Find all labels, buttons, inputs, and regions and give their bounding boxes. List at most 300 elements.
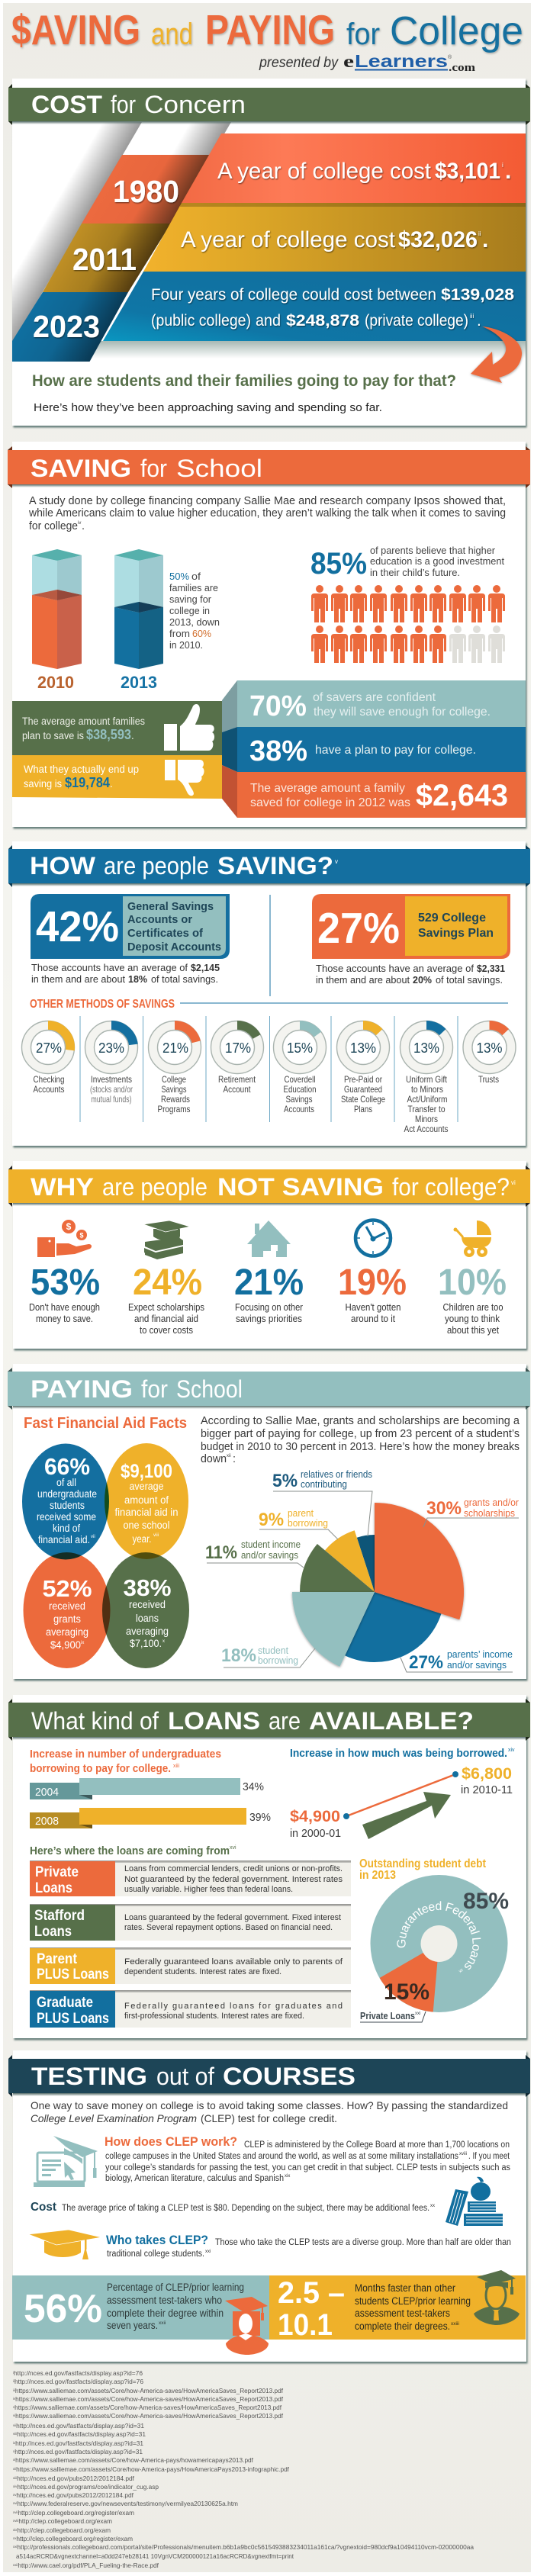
stat: 24 percent [128, 1262, 204, 1336]
how does CLEP work [105, 2134, 510, 2183]
donut: checking accounts 27 percent [21, 1021, 75, 1095]
heading ribbon: why not saving [8, 1166, 530, 1207]
heading ribbon: what kind of loans: AVAILABLE? [309, 1707, 474, 1735]
heading ribbon: how are people saving [8, 845, 530, 887]
donut: retirement account 17 percent: Account [223, 1084, 251, 1095]
fact: 9100 dollars: viii [153, 1533, 159, 1538]
who takes CLEP: Who takes CLEP? [106, 2233, 208, 2247]
heading ribbon: saving for school: for [140, 455, 167, 482]
chart: 2010 bar [32, 549, 82, 692]
fold shading [12, 122, 526, 359]
heading: increase in undergraduates borrowing: xiii [173, 1764, 180, 1769]
band: plan to save: The average amount families [22, 716, 145, 727]
donut: trusts 13 percent: 13% [476, 1040, 502, 1056]
stat: 19 percent: Haven't gotten [345, 1302, 401, 1313]
dividers [79, 1016, 458, 1122]
pie label: 18 percent student borrowing: 18% [221, 1645, 256, 1666]
card: 27 percent 529 plan: in them and are about [316, 974, 410, 986]
heading: fast financial aid facts: Fast Financial Aid Facts [24, 1415, 187, 1432]
intro paragraph [31, 2099, 508, 2124]
year 2023: 2023 [33, 309, 100, 344]
panel: loans [13, 1695, 529, 2041]
heading ribbon: why not saving: NOT SAVING [217, 1173, 384, 1201]
heading: increase in undergraduates borrowing: borrowing to pay for college. [30, 1763, 171, 1775]
1980 cost text: i [502, 162, 503, 169]
donut: college savings rewards 21 percent: Rewards [161, 1094, 190, 1105]
band: 56 percent: 56% [24, 2287, 102, 2331]
fact: 66 percent [37, 1453, 97, 1545]
families saving text: college in [169, 605, 210, 616]
heading ribbon: saving for school: School [176, 455, 262, 482]
band: actually saved: $19,784 [65, 775, 110, 790]
band: months faster: Months faster than other [355, 2282, 455, 2294]
stat: 85 percent of parents: education is a good investment [370, 555, 504, 567]
loan row: private: Private [35, 1864, 79, 1880]
fact: 38 percent [124, 1574, 171, 1649]
icon: thumb up [164, 704, 214, 751]
band: 2023 main [103, 272, 526, 341]
stat: 21 percent: 21% [234, 1262, 304, 1303]
chart: borrowed amount line: $4,900 [290, 1808, 340, 1825]
heading: increase in how much borrowed: Increase in how much was being borrowed. [290, 1748, 507, 1760]
intro paragraph: (CLEP) test for college credit. [201, 2112, 337, 2124]
heading ribbon: why not saving: WHY [31, 1173, 94, 1201]
2023 cost text: Four years of college could cost between [151, 286, 436, 304]
card: 42 percent general savings: Deposit Accounts [127, 941, 221, 954]
stat: 85 percent of parents: of parents believe that higher [370, 545, 496, 556]
band: actually saved: saving is [24, 778, 62, 790]
donut: retirement account 17 percent: 17% [225, 1040, 251, 1056]
stat: 10 percent: Children are too [442, 1302, 503, 1313]
chart: borrowed amount line [290, 1765, 513, 1840]
donut: coverdell 15 percent: Accounts [284, 1104, 314, 1114]
fact: 66 percent: undergraduate [37, 1488, 97, 1500]
footnotes [13, 2369, 474, 2569]
footnotes: x [13, 2449, 15, 2453]
heading ribbon: cost for concern [8, 84, 530, 125]
donut: uniform gift 13 percent: Minors [415, 1114, 438, 1124]
families saving text: of [191, 571, 201, 582]
pie label: 27 percent parents income: parents’ income [447, 1648, 513, 1660]
donut: college savings rewards 21 percent: Savings [162, 1084, 186, 1095]
band: 2011 main [143, 203, 526, 272]
label: private loans: Private Loans [360, 2010, 415, 2021]
band: 38 percent have a plan: 38% [249, 735, 307, 767]
donut: pre-paid 13 percent: Plans [354, 1104, 372, 1114]
donut: trusts 13 percent [463, 1021, 516, 1085]
band: months faster: assessment test-takers [355, 2307, 450, 2319]
paragraph: grants and scholarships: According to Sallie Mae, grants and scholarships are becoming a [201, 1415, 520, 1427]
intro paragraph: . [82, 520, 85, 532]
footnotes: xii [13, 2467, 16, 2471]
fact: 9100 dollars: one school [124, 1520, 169, 1531]
intro paragraph: One way to save money on college is to avoid taking some classes. How? By passing the standardized [31, 2099, 508, 2111]
band: 56 percent: assessment test-takers who [107, 2295, 222, 2306]
footnotes: http://nces.ed.gov/fastfacts/display.asp?id=31 [17, 2430, 146, 2438]
band: average saved [222, 765, 526, 818]
band: months faster: 2.5 – [278, 2276, 345, 2310]
footnotes: v [13, 2405, 15, 2409]
how does CLEP work: CLEP is administered by the College Board at more than 1,700 locations on [244, 2140, 510, 2150]
band: actually saved: What they actually end up [24, 764, 139, 775]
donut: checking accounts 27 percent: 27% [36, 1040, 62, 1056]
cost: xx [430, 2204, 435, 2208]
2023 cost text: iii [470, 313, 474, 320]
1980 cost text: $3,101 [435, 159, 500, 184]
bar: 2004 [30, 1778, 264, 1799]
fact: 66 percent: 66% [44, 1453, 90, 1480]
card: 27 percent 529 plan: Those accounts have an average of [316, 963, 474, 974]
pie label: 11 percent student income: student income [241, 1539, 301, 1550]
loan row: private: Loans from commercial lenders, credit unions or non-profits. [124, 1864, 343, 1873]
fact: 66 percent: of all [56, 1477, 76, 1488]
band: months faster: complete their degrees. [355, 2320, 450, 2332]
icon: hand with coins [37, 1220, 92, 1257]
bar: 2008: 39% [249, 1811, 271, 1824]
footnotes: vi [13, 2414, 15, 2417]
pie label: 30 percent grants [423, 1497, 520, 1527]
pictogram: people [311, 585, 505, 663]
families saving text [169, 571, 220, 651]
band: 2011 left fold [43, 224, 171, 292]
footnotes: http://www.cael.org/pdf/PLA_Fueling-the-Race.pdf [18, 2562, 159, 2569]
donut: college savings rewards 21 percent: College [162, 1074, 186, 1085]
footnotes: http://professionals.collegeboard.com/portal/site/Professionals/menuitem.b6b1a9bc0c5615493883234011a161ca/?vgnextoid=980dcf9a10494110vcm-02000000aa [17, 2543, 474, 2551]
footnotes: viii [13, 2432, 17, 2436]
fact: 9100 dollars [114, 1461, 179, 1545]
footnotes: http://nces.ed.gov/fastfacts/display.asp?id=76 [14, 2378, 143, 2385]
cost [31, 2201, 435, 2214]
pie label: 27 percent parents income: and/or savings [447, 1659, 507, 1671]
families saving text: 2013, down [169, 616, 220, 628]
heading: increase in undergraduates borrowing [30, 1748, 221, 1775]
icon: thumb down [165, 760, 204, 796]
pie label: 27 percent parents income: 27% [409, 1652, 443, 1673]
pie label: 11 percent student income: and/or savings [241, 1549, 298, 1561]
chart: outstanding debt donut: 15% [384, 1979, 429, 2005]
footnotes: http://nces.ed.gov/fastfacts/display.asp?id=31 [16, 2422, 144, 2430]
chart: borrowed amount line: in 2000-01 [290, 1828, 341, 1840]
chart: 2013 bar [114, 549, 163, 692]
footnotes: http://nces.ed.gov/pubs2012/2012184.pdf [17, 2475, 135, 2482]
heading ribbon: testing out of courses: TESTING [31, 2063, 147, 2090]
donut: pre-paid 13 percent: State College [341, 1094, 385, 1105]
footnotes: xv [13, 2493, 17, 2497]
heading ribbon: what kind of loans [8, 1699, 530, 1741]
stat: 19 percent [338, 1262, 407, 1324]
band: 2023 left fold [12, 292, 128, 362]
icon: laptop and graduation cap [34, 2136, 98, 2187]
footnotes: xvi [13, 2501, 17, 2505]
card: 42 percent general savings: 42% [36, 902, 119, 951]
loan row: stafford: Loans guaranteed by the federal government. Fixed interest [124, 1913, 341, 1922]
footnotes: http://nces.ed.gov/pubs2012/2012184.pdf [16, 2491, 134, 2499]
heading ribbon: paying for school: for [141, 1375, 168, 1403]
presented by eLearners logo: .com [449, 62, 476, 74]
families saving text: 60% [192, 628, 211, 639]
fact: 66 percent: financial aid. [38, 1534, 90, 1545]
donut: pre-paid 13 percent: Pre-Paid or [344, 1074, 382, 1085]
donut: pre-paid 13 percent [337, 1021, 389, 1114]
donut: coverdell 15 percent: 15% [287, 1040, 313, 1056]
pie label: 9 percent parent borrowing: borrowing [288, 1517, 328, 1529]
fact: 9100 dollars: $9,100 [121, 1461, 172, 1482]
footnotes: xiii [13, 2476, 17, 2480]
stat: 19 percent: 19% [338, 1262, 407, 1303]
pie label: 27 percent parents income [400, 1648, 513, 1673]
donut: coverdell 15 percent: Coverdell [284, 1074, 316, 1085]
intro paragraph: while Americans claim to value higher education, they aren’t walking the talk when it comes to saving [28, 507, 506, 519]
footnotes: xiv [13, 2484, 18, 2488]
loan row: graduate plus: first-professional students. Interest rates are fixed. [124, 2012, 304, 2021]
pie label: 18 percent student borrowing [221, 1645, 315, 1667]
heading ribbon: cost for concern: Concern [144, 91, 246, 118]
footnotes: https://www.salliemae.com/assets/Core/how-America-pays/howamericapays2013.pdf [15, 2456, 254, 2464]
families saving text: in 2010. [169, 639, 203, 651]
footnotes: xx [13, 2536, 17, 2540]
card: 27 percent 529 plan: Savings Plan [418, 927, 494, 940]
donut: uniform gift 13 percent: Act Accounts [404, 1124, 449, 1134]
heading: outstanding student debt: in 2013 [359, 1869, 396, 1882]
panel: cost for concern [12, 79, 526, 426]
how does CLEP work: . If you meet [468, 2152, 510, 2161]
heading ribbon: how are people saving: HOW [30, 852, 96, 880]
card: 27 percent 529 plan: $2,331 [477, 963, 505, 974]
card: 42 percent general savings: of total savings. [151, 973, 218, 985]
heading ribbon: testing out of courses: COURSES [223, 2063, 355, 2090]
stat: 53 percent: 53% [31, 1262, 100, 1303]
donut: college savings rewards 21 percent [148, 1021, 201, 1114]
pie label: 5 percent relatives: 5% [272, 1471, 298, 1491]
band: 70 percent confident: 70% [249, 690, 307, 722]
stat: 24 percent: 24% [133, 1262, 202, 1303]
question heading: How are students and their families going to pay for that? [32, 372, 456, 390]
pie label: 5 percent relatives: contributing [301, 1478, 347, 1490]
panel: saving for school [12, 442, 526, 827]
card: 42 percent general savings: 18% [128, 973, 147, 985]
footnotes: ii [13, 2379, 14, 2383]
how does CLEP work: college campuses in the United States and around the world, as well as at some military installations [105, 2152, 458, 2161]
stat: 21 percent [234, 1262, 304, 1324]
heading ribbon: how are people saving: are people [104, 852, 209, 880]
heading ribbon: what kind of loans: What kind of [31, 1707, 159, 1735]
donut: uniform gift 13 percent: to Minors [411, 1084, 443, 1095]
loan row: stafford: Stafford [34, 1908, 85, 1924]
band: 38 percent have a plan: have a plan to pay for college. [315, 744, 476, 757]
chart: outstanding debt donut: 85% [463, 1889, 509, 1914]
stat: 53 percent [29, 1262, 100, 1324]
stat: 19 percent: around to it [351, 1314, 395, 1324]
panel: paying for school [13, 1364, 526, 1679]
footnotes: http://clep.collegeboard.org/register/exam [16, 2535, 133, 2542]
donut: trusts 13 percent: Trusts [478, 1074, 499, 1085]
band: 1980 main [182, 133, 526, 203]
bar: 2004: 2004 [35, 1786, 59, 1799]
heading ribbon: testing out of courses: out of [156, 2063, 214, 2090]
card: 42 percent general savings: Accounts or [127, 913, 192, 926]
card: 42 percent general savings: Certificates of [127, 927, 204, 940]
fact: 38 percent: loans [136, 1613, 159, 1624]
fact: 52 percent [43, 1575, 92, 1651]
pie label: 9 percent parent borrowing [259, 1507, 338, 1539]
arrow: curved orange [471, 326, 522, 383]
fact: 66 percent: received some [37, 1511, 96, 1523]
footnotes: https://www.salliemae.com/assets/Core/how-America-pays/HowAmericaPays2013-infographic.pdf [16, 2465, 290, 2473]
footnotes: https://www.salliemae.com/assets/Core/how-America-saves/HowAmericaSaves_Report2013.pdf [15, 2387, 284, 2394]
2023 cost text: (private college) [365, 312, 468, 330]
band: 70 percent confident: of savers are confident [313, 691, 436, 704]
footnotes: http://www.federalreserve.gov/newsevents/testimony/vermilyea20130625a.htm [17, 2500, 238, 2507]
year 1980: 1980 [113, 174, 179, 209]
donut: checking accounts 27 percent: Accounts [34, 1084, 64, 1095]
donut: uniform gift 13 percent: 13% [413, 1040, 439, 1056]
donut: college savings rewards 21 percent: 21% [162, 1040, 188, 1056]
footnotes: ix [13, 2441, 16, 2445]
band: plan to save: . [131, 730, 134, 741]
chart: borrowed amount line: in 2010-11 [461, 1784, 513, 1796]
card: 42 percent general savings: $2,145 [191, 962, 220, 973]
donut: uniform gift 13 percent [400, 1021, 453, 1134]
donut: uniform gift 13 percent: Transfer to [407, 1104, 446, 1114]
donut: uniform gift 13 percent: Act/Uniform [407, 1094, 447, 1105]
heading ribbon: cost for concern: for [111, 91, 136, 118]
chart: outstanding debt donut: Guaranteed Federal Loans xx [397, 1901, 481, 1973]
donut: investments 23 percent: Investments [91, 1074, 132, 1085]
heading: outstanding student debt [359, 1857, 486, 1882]
presented by eLearners logo: e [343, 52, 354, 71]
card: 27 percent 529 plan: of total savings. [436, 974, 503, 986]
fact: 9100 dollars: year. [133, 1533, 151, 1545]
heading ribbon: why not saving: are people [102, 1173, 207, 1201]
footnotes: i [13, 2371, 14, 2375]
band: 56 percent [12, 2275, 269, 2340]
stat: 53 percent: Don't have enough [29, 1302, 100, 1313]
footnotes: iii [13, 2388, 15, 2392]
heading ribbon: cost for concern: COST [31, 91, 102, 118]
2011 cost text: A year of college cost [181, 227, 396, 252]
band: months faster: 10.1 [278, 2308, 333, 2342]
band: months faster: xxiii [451, 2321, 459, 2327]
2023 cost text: $248,878 [286, 312, 359, 330]
loan row: graduate plus [30, 1990, 351, 2028]
intro line: Here’s how they’ve been approaching saving and spending so far. [34, 401, 382, 414]
pie label: 30 percent grants: 30% [426, 1498, 462, 1519]
presented by eLearners logo: presented by [259, 55, 339, 71]
donut: investments 23 percent: (stocks and/or [90, 1084, 133, 1095]
fact: 38 percent: $7,100. [130, 1638, 162, 1649]
families saving text: 50% [169, 571, 189, 582]
donut: investments 23 percent [85, 1021, 137, 1105]
who takes CLEP: Those who take the CLEP tests are a diverse group. More than half are older than [215, 2238, 511, 2247]
intro paragraph: College Level Examination Program [31, 2112, 197, 2124]
loan row: parent plus: dependent students. Interest rates are fixed. [124, 1967, 281, 1976]
chart: 2013 bar: 2013 [121, 673, 157, 692]
icon: baby stroller [453, 1220, 491, 1257]
fact: 38 percent: received [129, 1599, 166, 1610]
heading ribbon: what kind of loans: are [269, 1707, 301, 1735]
pie label: 9 percent parent borrowing: 9% [259, 1510, 284, 1530]
heading ribbon: how are people saving: SAVING? [217, 852, 333, 880]
chart: borrowed amount line: $6,800 [462, 1765, 512, 1783]
donut: coverdell 15 percent: Savings [285, 1094, 313, 1105]
fact: 66 percent: students [50, 1500, 85, 1511]
heading: increase in undergraduates borrowing: Increase in number of undergraduates [30, 1748, 221, 1761]
card: 27 percent 529 plan: 20% [413, 974, 432, 986]
cost: The average price of taking a CLEP test is $80. Depending on the subject, there may be additional fees. [62, 2204, 429, 2213]
fact: 52 percent: averaging [46, 1626, 88, 1638]
donut: uniform gift 13 percent: Uniform Gift [406, 1074, 448, 1085]
icon: clock [355, 1220, 391, 1256]
fact: 52 percent: received [49, 1600, 85, 1612]
fact: 9100 dollars: financial aid in [114, 1507, 179, 1518]
panel: testing out of courses [12, 2050, 526, 2362]
footnotes: http://clep.collegeboard.org/exam [17, 2526, 111, 2534]
label: private loans: xxi [415, 2012, 420, 2016]
stat: 10 percent: 10% [438, 1262, 507, 1303]
pie label: 5 percent relatives: relatives or friends [301, 1468, 372, 1480]
band: 70 percent confident [222, 680, 526, 732]
paragraph: grants and scholarships [201, 1415, 520, 1465]
donut: checking accounts 27 percent: Checking [34, 1074, 64, 1085]
donut: pre-paid 13 percent: Guaranteed [344, 1084, 382, 1095]
loan row: private: Not guaranteed by the federal government. Interest rates [124, 1875, 343, 1884]
footnotes: http://nces.ed.gov/fastfacts/display.asp?id=31 [14, 2448, 143, 2455]
heading ribbon: how are people saving: v [335, 858, 338, 865]
stat: 24 percent: to cover costs [140, 1325, 193, 1336]
band: average saved: $2,643 [416, 779, 508, 812]
loan row: stafford: rates. Several repayment options. Based on financial need. [124, 1923, 333, 1932]
2023 cost text [151, 286, 514, 330]
stat: 21 percent: Focusing on other [235, 1302, 303, 1313]
donut: college savings rewards 21 percent: Programs [157, 1104, 191, 1114]
paragraph: grants and scholarships: xii [227, 1454, 231, 1458]
donut: investments 23 percent: 23% [98, 1040, 124, 1056]
1980 cost text: . [505, 159, 511, 184]
loan row: stafford: Loans [34, 1924, 72, 1940]
loan row: parent plus: Parent [37, 1951, 78, 1967]
presented by eLearners logo: ® [448, 54, 452, 60]
families saving text: saving for [169, 593, 212, 605]
fact: 52 percent: grants [53, 1613, 81, 1625]
how does CLEP work: xviii [459, 2152, 467, 2156]
band: plan to save [12, 701, 222, 755]
heading ribbon: what kind of loans: LOANS [168, 1707, 260, 1735]
pie label: 18 percent student borrowing: borrowing [258, 1655, 298, 1666]
2011 cost text: $32,026 [398, 227, 478, 252]
pie label: 18 percent student borrowing: student [258, 1645, 288, 1656]
card: 42 percent general savings: General Savings [127, 900, 214, 913]
band: average saved: saved for college in 2012 was [250, 796, 410, 809]
intro paragraph: iv [78, 521, 81, 526]
year 2011: 2011 [72, 242, 137, 277]
2023 cost text: $139,028 [441, 286, 514, 304]
footnotes: http://nces.ed.gov/fastfacts/display.asp?id=31 [15, 2439, 143, 2447]
footnotes: xi [13, 2458, 15, 2462]
donut: retirement account 17 percent [211, 1021, 264, 1095]
icon: female graduate [225, 2297, 269, 2355]
title: $AVING [11, 6, 140, 53]
loan row: parent plus: Federally guaranteed loans available only to parents of [124, 1957, 343, 1967]
icon: yellow graduation cap [28, 2230, 101, 2259]
band: actually saved: . [110, 778, 113, 790]
card: 27 percent 529 plan: 529 College [418, 912, 486, 925]
icon: hand with coins: $ [66, 1221, 72, 1232]
footnotes: a514acRCRD&vgnextchannel=a0dd247eb28141 10VgnVCM200000121a16acRCRD&vgnextfmt=print [16, 2552, 294, 2560]
heading ribbon: saving for school [8, 446, 530, 488]
2023 cost text: (public college) [151, 312, 251, 330]
fact: 66 percent: kind of [53, 1523, 80, 1534]
donut: coverdell 15 percent [273, 1021, 327, 1114]
